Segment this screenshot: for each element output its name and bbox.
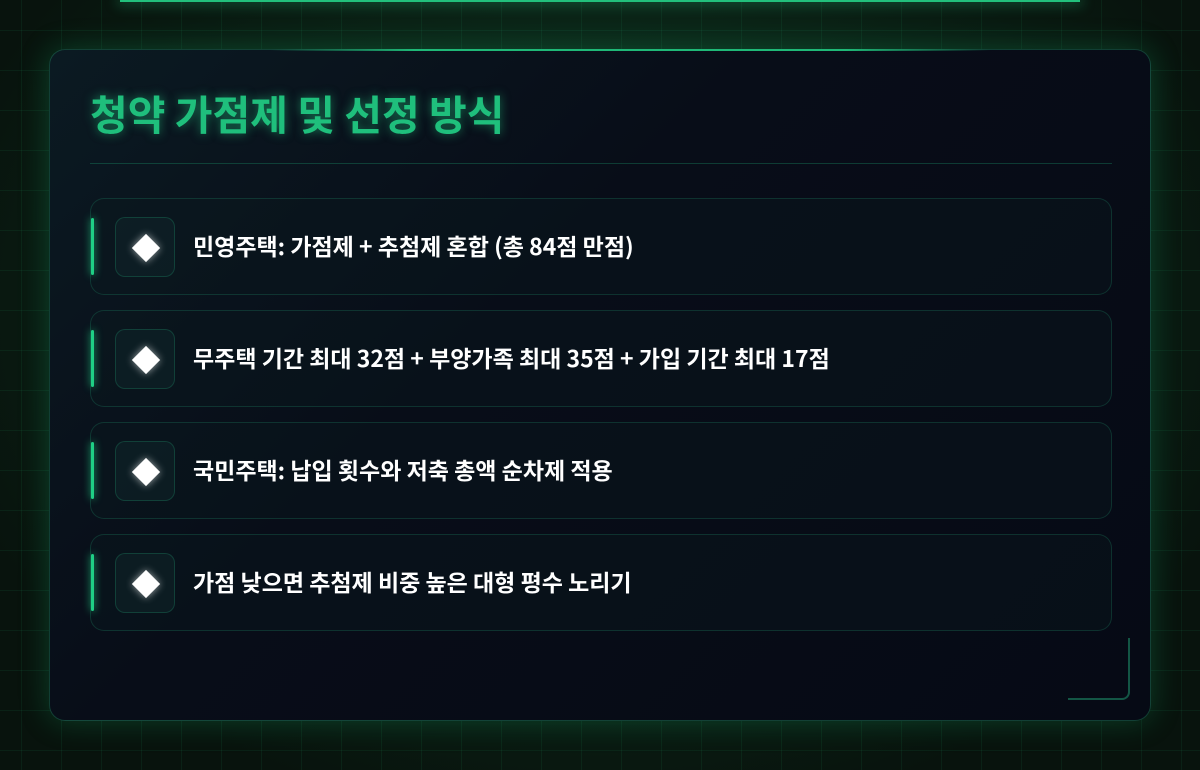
title: 청약 가점제 및 선정 방식	[90, 82, 504, 142]
text 4: 가점 낮으면 추첨제 비중 높은 대형 평수 노리기	[193, 564, 632, 598]
icon: diamond	[115, 217, 175, 277]
text 2: 무주택 기간 최대 32점 + 부양가족 최대 35점 + 가입 기간 최대 17점	[193, 340, 830, 374]
icon: diamond	[115, 329, 175, 389]
icon: diamond	[115, 441, 175, 501]
item 3	[90, 422, 1112, 519]
item 4	[90, 534, 1112, 631]
text 3: 국민주택: 납입 횟수와 저축 총액 순차제 적용	[193, 452, 613, 486]
item 1	[90, 198, 1112, 295]
icon: diamond	[115, 553, 175, 613]
text 1: 민영주택: 가점제 + 추첨제 혼합 (총 84점 만점)	[193, 228, 634, 262]
item 2	[90, 310, 1112, 407]
